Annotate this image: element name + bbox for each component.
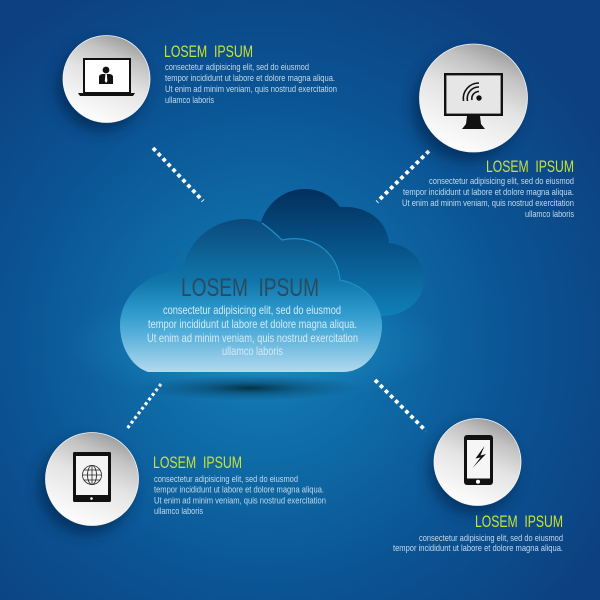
icon: tablet with globe xyxy=(73,452,111,502)
text: laptop: LOSEM IPSUM xyxy=(164,43,253,61)
text: phone: LOSEM IPSUM xyxy=(475,513,563,531)
central body text: Ut enim ad minim veniam, quis nostrud exercitation xyxy=(147,331,358,345)
dotted connector: top left xyxy=(153,148,203,201)
node: monitor xyxy=(413,44,528,161)
text: tablet xyxy=(153,454,326,516)
icon: smartphone with bolt xyxy=(464,435,493,485)
dotted connector: bottom left xyxy=(126,384,161,430)
text: monitor xyxy=(402,158,574,219)
dotted connector: bottom right xyxy=(375,380,426,431)
text: tablet: tempor incididunt ut labore et dolore magna aliqua. xyxy=(154,484,324,494)
icon: laptop with person xyxy=(78,59,135,96)
cloud shadow xyxy=(135,375,365,401)
node: laptop xyxy=(57,36,150,131)
cloud rim highlight xyxy=(262,223,375,303)
node: tablet xyxy=(39,432,138,534)
text: laptop: consectetur adipisicing elit, sed do eiusmod xyxy=(165,61,309,72)
text: tablet: ullamco laboris xyxy=(154,505,203,516)
text: phone: consectetur adipisicing elit, sed do eiusmod xyxy=(419,532,563,543)
node: phone xyxy=(429,418,521,514)
dotted connector: top right xyxy=(377,151,429,202)
central body text xyxy=(147,303,358,358)
text: laptop: tempor incididunt ut labore et dolore magna aliqua. xyxy=(165,72,335,83)
text: tablet: Ut enim ad minim veniam, quis nostrud exercitation xyxy=(154,494,326,506)
central body text: tempor incididunt ut labore et dolore magna aliqua. xyxy=(148,317,357,331)
text: phone xyxy=(393,513,563,553)
text: laptop xyxy=(164,43,337,105)
icon: monitor with wifi xyxy=(445,74,502,129)
text: phone: tempor incididunt ut labore et dolore magna aliqua. xyxy=(393,542,563,553)
text: monitor: ullamco laboris xyxy=(525,208,574,219)
central body text: ullamco laboris xyxy=(222,344,283,358)
text: tablet: LOSEM IPSUM xyxy=(153,454,242,472)
text: laptop: Ut enim ad minim veniam, quis nostrud exercitation xyxy=(165,83,337,94)
central heading: LOSEM IPSUM xyxy=(181,274,319,302)
back cloud xyxy=(250,189,424,316)
cloud graphic xyxy=(120,189,424,372)
text: tablet: consectetur adipisicing elit, sed do eiusmod xyxy=(154,473,298,484)
front cloud xyxy=(120,219,382,372)
text: laptop: ullamco laboris xyxy=(165,94,214,105)
central body text: consectetur adipisicing elit, sed do eiusmod xyxy=(163,303,341,317)
